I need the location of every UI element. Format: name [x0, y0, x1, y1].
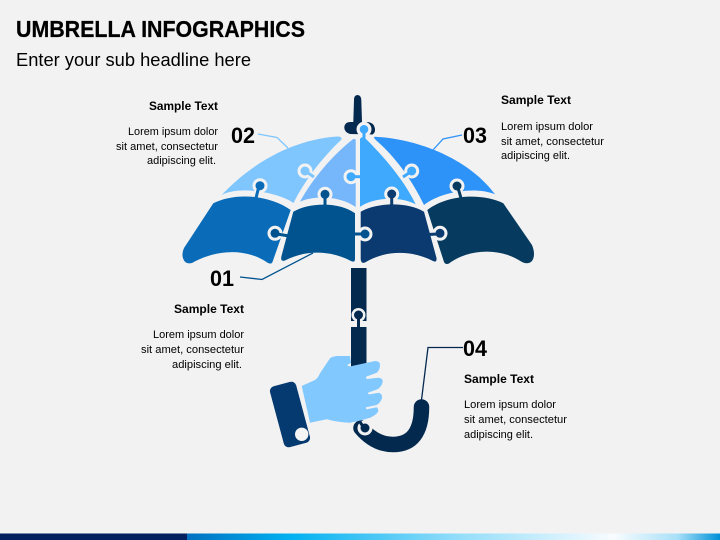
handle hook [361, 407, 422, 444]
puzzle connector: tip into canopy [356, 122, 372, 141]
leader line 03 [433, 135, 462, 150]
shirt cuff [269, 381, 311, 448]
canopy segment: deep teal lower right [427, 197, 534, 264]
callout 03: sit amet, consectetur [501, 136, 604, 148]
bottom bar [0, 534, 720, 540]
callout 03: Lorem ipsum dolor [501, 121, 593, 133]
umbrella handle [348, 268, 422, 444]
callout 04: 04 [463, 336, 488, 361]
puzzle connector: bright panel into strong panel [403, 164, 419, 178]
puzzle connector: lower left into light panel [252, 178, 268, 198]
callout 02: Sample Text [149, 99, 218, 113]
canopy segment: mid blue top [300, 139, 356, 207]
callout 02: sit amet, consectetur [116, 141, 218, 153]
canopy segment: bright blue top [360, 137, 416, 207]
puzzle connector: light panel into mid panel [298, 164, 314, 178]
canopy segment: blue lower left [182, 196, 291, 264]
umbrella tip [344, 95, 375, 134]
callout 04: Lorem ipsum dolor [464, 399, 556, 411]
puzzle connector: navy panel into teal panel [428, 226, 448, 241]
callout 03: adipiscing elit. [501, 150, 570, 162]
callout 01: Sample Text [174, 302, 244, 316]
hand [302, 356, 383, 423]
handle upper shaft [351, 268, 366, 321]
callout 04: sit amet, consectetur [464, 414, 567, 426]
callout 03 [463, 93, 604, 162]
callout 02: adipiscing elit. [147, 155, 216, 167]
hook connector [358, 420, 372, 436]
canopy segment: light blue top left [222, 136, 342, 203]
puzzle connector: bright panel into mid panel [344, 169, 361, 184]
subtitle: Enter your sub headline here [16, 50, 251, 70]
canopy segment: navy lower middle [361, 204, 437, 263]
callout 01: adipiscing elit. [172, 359, 242, 371]
callout 04: Sample Text [464, 372, 534, 386]
title: UMBRELLA INFOGRAPHICS [16, 16, 305, 42]
callout 01: sit amet, consectetur [141, 344, 244, 356]
callout 03: 03 [463, 123, 487, 148]
puzzle connector: dark panel into lower left [268, 226, 289, 241]
leader line 02 [258, 134, 288, 148]
puzzle connector: teal panel up [450, 178, 464, 198]
callout 01 [141, 266, 244, 371]
handle connector [348, 308, 368, 328]
leader line 01 [240, 253, 313, 280]
leader line 04 [422, 348, 463, 400]
puzzle connector: dark panel into navy panel [354, 226, 372, 242]
callout 02 [116, 99, 255, 167]
callout 04 [463, 336, 567, 441]
umbrella [182, 95, 534, 264]
callout 02: 02 [231, 123, 255, 148]
callout 04: adipiscing elit. [464, 429, 533, 441]
callout 01: 01 [210, 266, 234, 291]
callout 02: Lorem ipsum dolor [128, 126, 218, 138]
callout 01: Lorem ipsum dolor [153, 329, 244, 341]
puzzle connector: navy panel up [384, 186, 399, 206]
puzzle connector: dark panel up [318, 187, 332, 206]
canopy segment: strong blue top right [374, 137, 495, 205]
callout 03: Sample Text [501, 93, 571, 107]
canopy segment: dark blue lower middle [281, 205, 355, 262]
handle lower shaft [351, 327, 366, 369]
